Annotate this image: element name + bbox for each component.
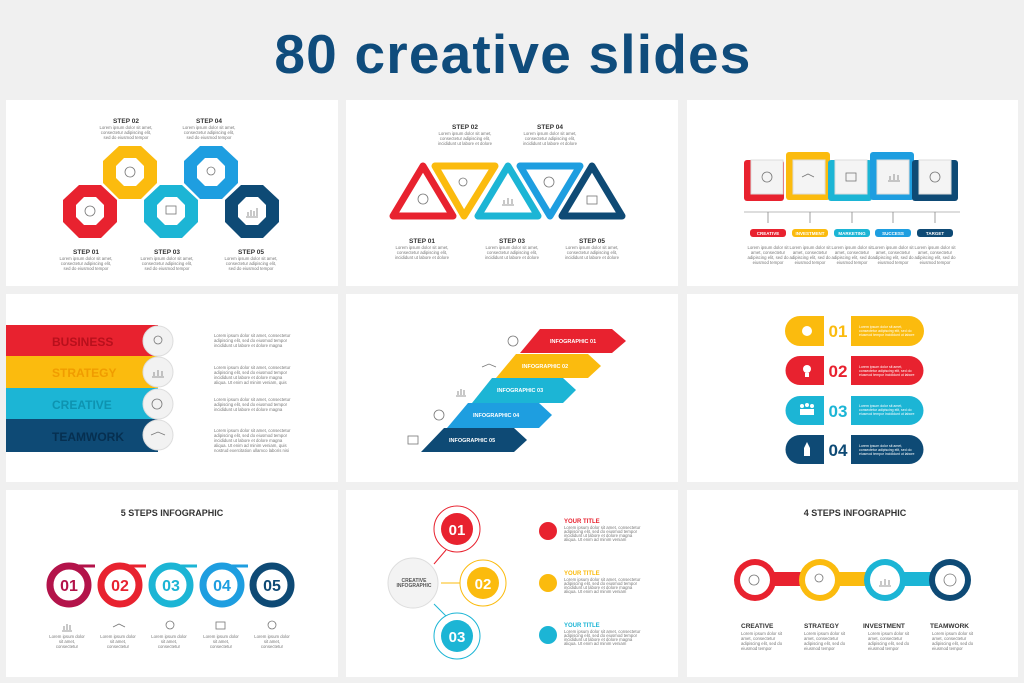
panel: 4 steps: Lorem ipsum dolor sit [932,631,974,636]
panel: 5 steps: consectetur [261,644,284,649]
panel: bars: incididunt ut labore et dolore magna [214,407,283,412]
title: 80 creative slides [274,23,752,85]
panel: triangles: consectetur adipiscing elit, [487,250,537,255]
panel: octagons: sed do eiusmod tempor [229,266,274,271]
panel: squares: TARGET [926,231,944,236]
panel: octagons: STEP 01 [73,249,99,256]
panel: squares [687,100,1018,286]
panel: numbered pills [687,294,1018,482]
panel: squares: adipiscing elit, sed do [914,255,956,260]
panel: numbered pills: eiusmod tempor incididunt ut labore [859,412,915,416]
panel: creative infographic circles: incididunt ut labore et dolore magna [564,585,633,590]
panel: 5 steps: 01 [60,578,78,595]
panel: octagons: consectetur adipiscing elit, [142,261,192,266]
panel: squares: SUCCESS [882,231,904,236]
panel: 5 steps: consectetur [56,644,79,649]
panel: 4 steps: amet, consectetur [868,636,903,641]
panel: octagons: sed do eiusmod tempor [64,266,109,271]
panel: bars: adipiscing elit, sed do eiusmod tempor [214,370,288,375]
panel: 5 steps: 03 [162,578,180,595]
panel: bars: aliqua. Ut enim ad minim veniam, quis [214,380,287,385]
panel: squares: adipiscing elit, sed do [872,255,914,260]
panel: 4 steps: Lorem ipsum dolor sit [868,631,910,636]
panel: numbered pills: consectetur adipiscing elit, sed do [859,369,912,373]
panel: triangles: incididunt ut labore et dolore [565,255,620,260]
panel: squares: adipiscing elit, sed do [831,255,873,260]
panel: staircase arrows: INFOGRAPHIC 03 [497,388,543,394]
panel: squares: eiusmod tempor [795,260,826,265]
panel: triangles: consectetur adipiscing elit, [397,250,447,255]
panel: squares: eiusmod tempor [753,260,784,265]
panel: 4 steps: adipiscing elit, sed do [868,641,910,646]
panel: squares: adipiscing elit, sed do [747,255,789,260]
panel: octagons: Lorem ipsum dolor sit amet, [224,256,278,261]
panel: numbered pills: 01 [829,322,847,341]
panel: triangles: Lorem ipsum dolor sit amet, [523,131,577,136]
panel: bars: adipiscing elit, sed do eiusmod tempor [214,402,288,407]
panel: 5 steps: Lorem ipsum dolor [203,634,239,639]
panel: triangles: consectetur adipiscing elit, [440,136,490,141]
panel: 4 steps: 4 STEPS INFOGRAPHIC [804,508,907,518]
panel: 5 steps: 5 STEPS INFOGRAPHIC [121,508,224,518]
panel: numbered pills: 03 [829,402,847,421]
panel: 4 steps: eiusmod tempor [741,646,772,651]
panel: staircase arrows: INFOGRAPHIC 04 [473,413,520,419]
panel: numbered pills: Lorem ipsum dolor sit amet, [859,444,902,448]
panel: octagons: sed do eiusmod tempor [104,135,149,140]
panel: triangles: STEP 05 [579,238,605,245]
panel: bars: aliqua. Ut enim ad minim veniam, quis [214,443,287,448]
panel: 4 steps: Lorem ipsum dolor sit [804,631,846,636]
panel: triangles: Lorem ipsum dolor sit amet, [395,245,449,250]
panel: numbered pills: Lorem ipsum dolor sit amet, [859,404,902,408]
panel: 5 steps: sit amet, [161,639,177,644]
panel: octagons [6,100,338,286]
panel: squares: eiusmod tempor [837,260,868,265]
panel: squares: Lorem ipsum dolor sit [914,245,956,250]
panel: creative infographic circles [346,490,678,677]
panel: 5 steps: 04 [213,578,231,595]
panel: 5 steps: 02 [111,578,129,595]
panel: triangles: consectetur adipiscing elit, [567,250,617,255]
panel: 4 steps: adipiscing elit, sed do [804,641,846,646]
panel: squares: amet, consectetur [876,250,911,255]
panel: octagons: Lorem ipsum dolor sit amet, [182,125,236,130]
panel: staircase arrows: INFOGRAPHIC 05 [449,438,495,444]
panel: bars: Lorem ipsum dolor sit amet, consectetur [214,397,291,402]
panel: creative infographic circles: 01 [449,522,465,539]
panel: creative infographic circles: incididunt ut labore et dolore magna [564,637,633,642]
panel: creative infographic circles: Lorem ipsum dolor sit amet, consectetur [564,629,641,634]
panel: 4 steps: Lorem ipsum dolor sit [741,631,783,636]
panel: 4 steps: INVESTMENT [863,623,905,630]
panel: bars: CREATIVE [52,398,112,412]
panel: bars: Lorem ipsum dolor sit amet, consectetur [214,428,291,433]
panel: octagons: Lorem ipsum dolor sit amet, [99,125,153,130]
panel: octagons: STEP 05 [238,249,264,256]
panel: numbered pills: Lorem ipsum dolor sit amet, [859,325,902,329]
panel: bars [6,294,338,482]
panel: creative infographic circles: 03 [449,629,465,646]
panel: octagons: Lorem ipsum dolor sit amet, [59,256,113,261]
panel: 5 steps: consectetur [210,644,233,649]
panel: octagons: STEP 02 [113,118,139,125]
panel: bars: incididunt ut labore et dolore magna [214,343,283,348]
panel: bars: adipiscing elit, sed do eiusmod tempor [214,338,288,343]
panel: triangles: incididunt ut labore et dolore [395,255,450,260]
panel: triangles: STEP 04 [537,124,563,131]
panel: bars: Lorem ipsum dolor sit amet, consectetur [214,333,291,338]
panel: triangles: STEP 02 [452,124,478,131]
panel: octagons: consectetur adipiscing elit, [226,261,276,266]
panel: bars: Lorem ipsum dolor sit amet, consectetur [214,365,291,370]
panel: bars: BUSINESS [52,335,113,349]
panel: 4 steps: amet, consectetur [741,636,776,641]
panel: squares: eiusmod tempor [878,260,909,265]
panel: 5 steps: Lorem ipsum dolor [254,634,290,639]
panel: squares: Lorem ipsum dolor sit [747,245,789,250]
panel: octagons: Lorem ipsum dolor sit amet, [140,256,194,261]
panel: 5 steps [6,490,338,677]
panel: octagons: consectetur adipiscing elit, [61,261,111,266]
panel: creative infographic circles: aliqua. Ut enim ad minim veniam [564,589,627,594]
panel: numbered pills: 04 [829,441,848,460]
panel: creative infographic circles: adipiscing elit, sed do eiusmod tempor [564,581,638,586]
panel: staircase arrows [346,294,678,482]
panel: numbered pills: eiusmod tempor incididunt ut labore [859,373,915,377]
panel: numbered pills: eiusmod tempor incididunt ut labore [859,333,915,337]
panel: triangles: incididunt ut labore et dolore [485,255,540,260]
panel: creative infographic circles: Lorem ipsum dolor sit amet, consectetur [564,577,641,582]
panel: octagons: consectetur adipiscing elit, [184,130,234,135]
panel: squares: amet, consectetur [793,250,828,255]
panel: 5 steps: sit amet, [213,639,229,644]
panel: 4 steps: eiusmod tempor [932,646,963,651]
panel: numbered pills: consectetur adipiscing elit, sed do [859,329,912,333]
panel: 4 steps: adipiscing elit, sed do [932,641,974,646]
panel: 5 steps: consectetur [158,644,181,649]
panel: 5 steps: Lorem ipsum dolor [151,634,187,639]
panel: staircase arrows: INFOGRAPHIC 02 [522,364,568,370]
panel: bars: adipiscing elit, sed do eiusmod tempor [214,433,288,438]
panel: triangles: incididunt ut labore et dolore [438,141,493,146]
panel: triangles: Lorem ipsum dolor sit amet, [438,131,492,136]
panel: 4 steps: eiusmod tempor [868,646,899,651]
panel: creative infographic circles: adipiscing elit, sed do eiusmod tempor [564,529,638,534]
panel: creative infographic circles: YOUR TITLE [564,519,600,525]
panel: 5 steps: 05 [263,578,281,595]
panel: bars: TEAMWORK [52,430,124,444]
panel: squares: CREATIVE [757,231,779,236]
panel: octagons: STEP 03 [154,249,180,256]
panel: squares: eiusmod tempor [920,260,951,265]
panel: octagons: sed do eiusmod tempor [187,135,232,140]
panel: bars: STRATEGY [52,366,116,380]
panel: 5 steps: consectetur [107,644,130,649]
panel: staircase arrows: INFOGRAPHIC 01 [550,339,596,345]
panel: creative infographic circles: YOUR TITLE [564,571,600,577]
panel: 4 steps: amet, consectetur [804,636,839,641]
panel: squares: amet, consectetur [751,250,786,255]
panel: 4 steps: CREATIVE [741,623,774,630]
panel: bars: incididunt ut labore et dolore magna [214,375,283,380]
panel: triangles: STEP 03 [499,238,525,245]
panel: triangles: Lorem ipsum dolor sit amet, [565,245,619,250]
panel: 4 steps: adipiscing elit, sed do [741,641,783,646]
panel: 5 steps: sit amet, [59,639,75,644]
panel: creative infographic circles: aliqua. Ut enim ad minim veniam [564,641,627,646]
panel: creative infographic circles: 02 [475,576,491,593]
panel: triangles: consectetur adipiscing elit, [525,136,575,141]
panel: 4 steps: STRATEGY [804,623,840,630]
panel: creative infographic circles: INFOGRAPHIC [396,583,432,589]
panel: numbered pills: consectetur adipiscing elit, sed do [859,448,912,452]
panel: bars: incididunt ut labore et dolore magna [214,438,283,443]
panel: numbered pills: eiusmod tempor incididunt ut labore [859,452,915,456]
panel: squares: Lorem ipsum dolor sit [872,245,914,250]
panel: octagons: consectetur adipiscing elit, [101,130,151,135]
panel: triangles: incididunt ut labore et dolore [523,141,578,146]
panel: creative infographic circles: CREATIVE [402,578,427,584]
panel: squares: Lorem ipsum dolor sit [789,245,831,250]
panel: 4 steps: amet, consectetur [932,636,967,641]
panel: triangles: Lorem ipsum dolor sit amet, [485,245,539,250]
panel: numbered pills: consectetur adipiscing elit, sed do [859,408,912,412]
panel: numbered pills: 02 [829,362,847,381]
panel: 5 steps: Lorem ipsum dolor [100,634,136,639]
panel: 4 steps [687,490,1018,677]
panel: 5 steps: sit amet, [264,639,280,644]
panel: 5 steps: sit amet, [110,639,126,644]
panel: squares: amet, consectetur [918,250,953,255]
panel: squares: amet, consectetur [835,250,870,255]
panel: creative infographic circles: adipiscing elit, sed do eiusmod tempor [564,633,638,638]
panel: numbered pills: Lorem ipsum dolor sit amet, [859,365,902,369]
panel: octagons: STEP 04 [196,118,222,125]
panel: creative infographic circles: aliqua. Ut enim ad minim veniam [564,537,627,542]
panel: squares: MARKETING [838,231,866,236]
panel: triangles: STEP 01 [409,238,435,245]
panel: octagons: sed do eiusmod tempor [145,266,190,271]
panel: creative infographic circles: incididunt ut labore et dolore magna [564,533,633,538]
panel: squares: INVESTMENT [795,231,825,236]
panel: triangles [346,100,678,286]
panel: squares: adipiscing elit, sed do [789,255,831,260]
panel: 4 steps: TEAMWORK [930,623,969,630]
panel: creative infographic circles: Lorem ipsum dolor sit amet, consectetur [564,525,641,530]
panel: bars: nostrud exercitation ullamco laboris nisi [214,448,289,453]
panel: creative infographic circles: YOUR TITLE [564,623,600,629]
panel: 4 steps: eiusmod tempor [804,646,835,651]
panel: 5 steps: Lorem ipsum dolor [49,634,85,639]
panel: squares: Lorem ipsum dolor sit [831,245,873,250]
